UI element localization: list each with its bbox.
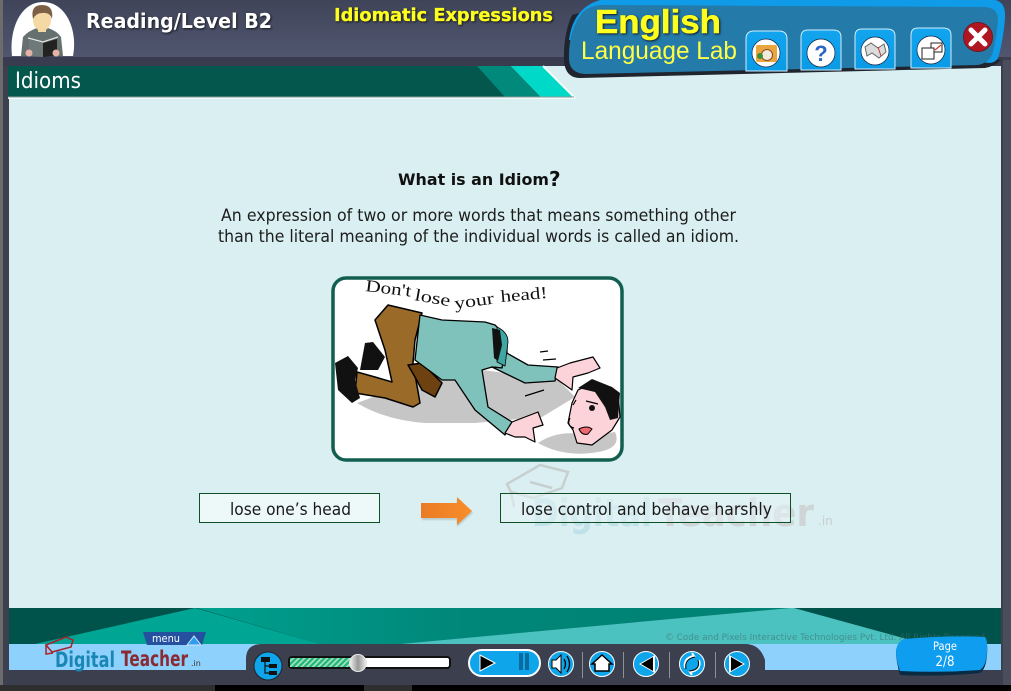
menu tab: menu: [152, 632, 180, 645]
icon: next: [724, 652, 750, 676]
brand wordmark: [581, 3, 737, 65]
menu tab: [143, 632, 206, 645]
copyright line: © Code and Pixels Interactive Technologies Pvt. Ltd. All Rights Reserved: [665, 633, 985, 643]
header bar: [3, 0, 1011, 57]
neck opening: [492, 327, 508, 366]
logo: Digital Teacher: [46, 637, 201, 672]
teal footer band: [9, 608, 1001, 644]
severed head: [568, 379, 620, 445]
brand wordmark: English: [595, 3, 721, 40]
icon: home: [590, 652, 614, 676]
header title: Reading/Level B2: Reading/Level B2: [86, 9, 272, 33]
term box: lose one's head: [200, 494, 380, 522]
section heading banner: Idioms: Idioms: [15, 69, 81, 94]
watermark: Digital Teacher: [507, 465, 833, 535]
caption: Don't lose your head!: lose: [413, 285, 452, 310]
meaning box: lose control and behave harshly: lose control and behave harshly: [521, 500, 772, 520]
icon tab: book: [855, 29, 895, 69]
icon tab: help: [801, 30, 841, 70]
watermark: Digital Teacher: Digital: [532, 491, 652, 535]
content panel: [9, 66, 1001, 609]
logo: Digital Teacher: Digital: [55, 648, 115, 672]
logo: Digital Teacher: .in: [191, 659, 201, 668]
definition text: than the literal meaning of the individual words is called an idiom.: [218, 227, 739, 247]
play and pause control: [469, 650, 540, 676]
icon tab: window: [911, 28, 951, 68]
hands: [505, 357, 600, 442]
icon: replay: [680, 652, 704, 676]
brand wordmark: Language Lab: [581, 37, 737, 65]
caption: Don't lose your head!: head!: [500, 283, 548, 306]
caption: Don't lose your head!: Don't: [365, 276, 413, 301]
logo: Digital Teacher: Teacher: [121, 647, 188, 671]
definition text: [218, 206, 739, 247]
arrow: [421, 497, 473, 527]
progress slider: [289, 654, 450, 672]
trousers: [355, 305, 422, 407]
control bar: [246, 644, 765, 671]
icon: student reading avatar: [12, 2, 74, 57]
darker strip under header: [3, 57, 1003, 66]
heading: What is an Idiom?: ?: [549, 167, 561, 191]
shoes: [335, 342, 385, 403]
motion lines: [525, 351, 556, 396]
caption: Don't lose your head!: [365, 276, 548, 313]
icon: volume: [548, 652, 574, 676]
floor shadows: [357, 370, 617, 454]
page indicator: Page: [933, 639, 957, 653]
meaning box: lose control and behave harshly: [500, 494, 790, 522]
close button: [964, 22, 992, 52]
watermark: Digital Teacher: .in: [818, 514, 833, 528]
page indicator: [896, 636, 987, 676]
icon tab: history: [746, 31, 787, 71]
section heading banner: Idioms: [8, 66, 576, 99]
watermark: Digital Teacher: Teacher: [658, 491, 814, 535]
icon: outline tree: [254, 652, 282, 680]
caption: Don't lose your head!: your: [453, 289, 496, 313]
page indicator: 2/8: [936, 654, 954, 670]
lower leg: [408, 363, 442, 397]
icon: previous: [634, 652, 658, 676]
shirt body and near arm: [415, 315, 512, 435]
far arm: [492, 352, 558, 383]
light blue footer strip: [9, 644, 1001, 670]
header subtitle: Idiomatic Expressions: Idiomatic Expressions: [334, 5, 553, 26]
icon tab: help: ?: [814, 41, 828, 66]
brand panel: English Language Lab: [564, 0, 1005, 78]
illustration: Don't lose your head: [333, 276, 622, 460]
heading: What is an Idiom?: What is an Idiom: [398, 170, 549, 189]
definition text: An expression of two or more words that means something other: [221, 206, 736, 226]
term box: lose one's head: lose one’s head: [230, 500, 351, 520]
